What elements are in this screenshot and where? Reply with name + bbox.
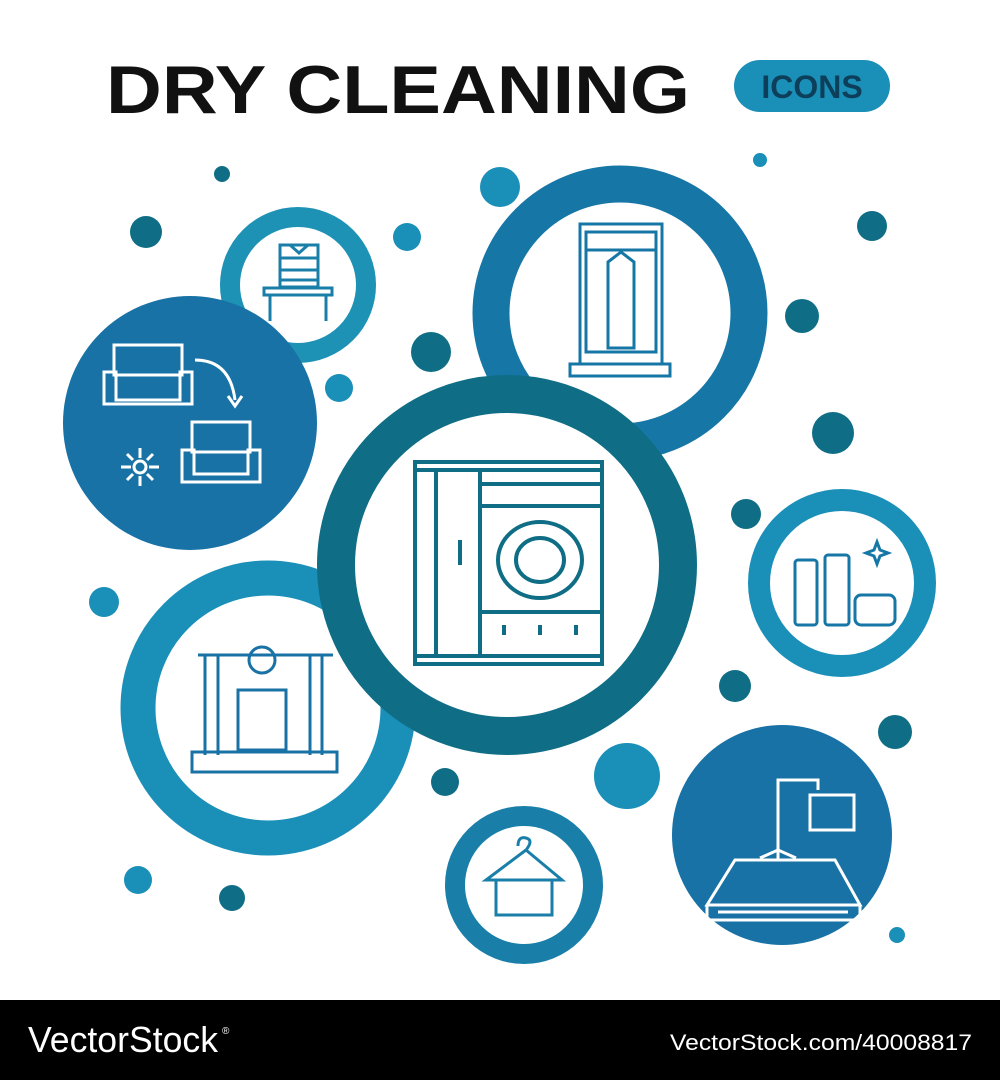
badge: icons bbox=[734, 60, 890, 112]
panel: cosmetics ring bbox=[759, 500, 925, 666]
panel: folded clothes ring bbox=[230, 217, 366, 353]
title bbox=[106, 52, 890, 128]
icon: receptionist with clothes rack bbox=[192, 647, 337, 772]
footer bar: VectorStock bbox=[28, 1019, 219, 1060]
icon: garment steamer cabinet bbox=[570, 224, 670, 376]
badge: icons: ICONS bbox=[761, 69, 863, 105]
icon: bottles and jar bbox=[795, 542, 895, 625]
icon: dry cleaning machine bbox=[415, 462, 602, 664]
panel: armchair circle bbox=[63, 296, 317, 550]
decorative dots bbox=[89, 153, 912, 943]
footer bar bbox=[0, 1000, 1000, 1080]
footer bar: ® bbox=[222, 1026, 230, 1037]
title: DRY CLEANING bbox=[106, 52, 690, 128]
panel: receptionist ring bbox=[138, 578, 398, 838]
panel: carpet cleaner circle bbox=[672, 725, 892, 945]
icon: stacked shirts on table bbox=[264, 245, 332, 321]
icon: armchairs with arrow bbox=[104, 345, 260, 486]
icon: carpet cleaning machine bbox=[707, 780, 860, 920]
icon: hanger with cloth bbox=[486, 838, 562, 915]
panel: hanger ring bbox=[455, 816, 593, 954]
panel: main machine ring bbox=[336, 394, 678, 736]
panel: garment closet ring bbox=[491, 184, 749, 442]
footer bar: VectorStock.com/40008817 bbox=[670, 1030, 972, 1055]
